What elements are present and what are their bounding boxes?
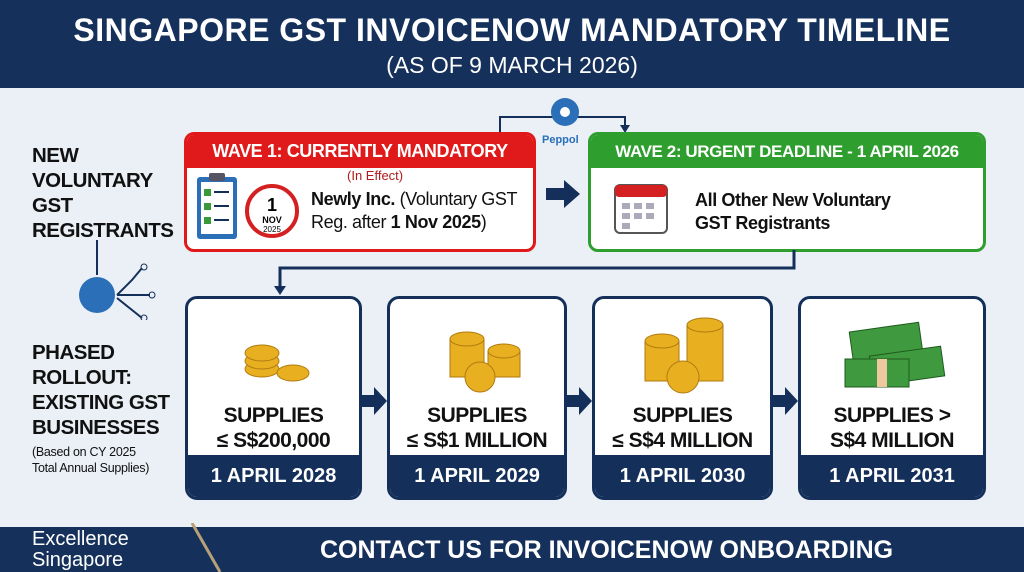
subtitle: (AS OF 9 MARCH 2026) bbox=[386, 52, 638, 78]
card 4: S$4 MILLION bbox=[830, 429, 954, 452]
in effect: (In Effect) bbox=[347, 168, 403, 183]
left label: new voluntary: NEW bbox=[32, 144, 78, 167]
wave 2 text: GST Registrants bbox=[695, 213, 830, 233]
connector: peppol bbox=[499, 98, 630, 132]
left label: phased rollout: EXISTING GST bbox=[32, 391, 170, 414]
wave 1 text: Newly Inc. (Voluntary GST bbox=[311, 189, 517, 209]
connector: wave2 to phased bbox=[274, 250, 796, 295]
card 1: ≤ S$200,000 bbox=[217, 429, 330, 452]
icon: network globe bbox=[79, 240, 156, 320]
card 2: ≤ S$1 MILLION bbox=[407, 429, 547, 452]
footer call to action: CONTACT US FOR INVOICENOW ONBOARDING bbox=[320, 536, 893, 564]
left label: phased rollout: BUSINESSES bbox=[32, 416, 159, 439]
card 4: SUPPLIES > bbox=[834, 404, 950, 427]
card 1: SUPPLIES bbox=[224, 404, 323, 427]
left label: phased rollout: PHASED bbox=[32, 341, 114, 364]
card 3 bbox=[592, 296, 773, 500]
wave 2 text: All Other New Voluntary bbox=[695, 190, 890, 210]
card 4: 1 APRIL 2031 bbox=[829, 465, 955, 487]
card 2: 1 APRIL 2029 bbox=[414, 465, 540, 487]
footer brand bbox=[32, 528, 129, 571]
wave 1 text: Reg. after 1 Nov 2025) bbox=[311, 212, 486, 232]
left label: new voluntary: REGISTRANTS bbox=[32, 219, 173, 242]
card 2: SUPPLIES bbox=[427, 404, 527, 427]
icon: cash bundles bbox=[844, 322, 946, 388]
arrow 1 bbox=[362, 387, 387, 415]
peppol label: Peppol bbox=[542, 134, 579, 146]
wave 2 text bbox=[695, 190, 891, 233]
icon: clipboard and clock: 2025 bbox=[263, 225, 281, 234]
left label: new voluntary: VOLUNTARY bbox=[32, 169, 153, 192]
left label: phased rollout: ROLLOUT: bbox=[32, 366, 132, 389]
wave 1 header bbox=[187, 135, 533, 168]
card 3: 1 APRIL 2030 bbox=[620, 465, 745, 487]
arrow 3 bbox=[773, 387, 798, 415]
card 1: 1 APRIL 2028 bbox=[211, 465, 336, 487]
icon: clipboard and clock: 1 bbox=[267, 195, 277, 215]
wave 2 box bbox=[588, 132, 986, 252]
icon: coins bbox=[244, 344, 310, 382]
card 3: SUPPLIES bbox=[633, 404, 732, 427]
left label: phased rollout bbox=[32, 341, 170, 475]
header bbox=[0, 0, 1024, 88]
left label: phased rollout: Total Annual Supplies) bbox=[32, 461, 149, 475]
left label: new voluntary bbox=[32, 144, 174, 242]
wave 1 box bbox=[184, 132, 536, 252]
icon: clipboard and clock: NOV bbox=[262, 215, 282, 225]
left label: phased rollout: (Based on CY 2025 bbox=[32, 445, 136, 459]
icon: clipboard and clock bbox=[197, 173, 299, 239]
footer brand: Singapore bbox=[32, 549, 123, 571]
wave 1 header: WAVE 1: CURRENTLY MANDATORY bbox=[212, 141, 508, 161]
title: SINGAPORE GST INVOICENOW MANDATORY TIMELINE bbox=[73, 12, 951, 48]
icon: coin stacks bbox=[450, 332, 520, 392]
wave 2 header: WAVE 2: URGENT DEADLINE - 1 APRIL 2026 bbox=[615, 142, 959, 161]
card 4 bbox=[798, 296, 986, 500]
card 2 bbox=[387, 296, 567, 500]
arrow: wave1 to wave2 bbox=[546, 180, 580, 208]
footer brand: Excellence bbox=[32, 528, 129, 550]
left label: new voluntary: GST bbox=[32, 194, 73, 217]
card 1 bbox=[185, 296, 362, 500]
arrow 2 bbox=[567, 387, 592, 415]
footer bbox=[0, 527, 1024, 572]
card 3: ≤ S$4 MILLION bbox=[612, 429, 753, 452]
wave 2 header bbox=[591, 135, 983, 168]
wave 1 text bbox=[311, 189, 518, 232]
icon: calendar bbox=[614, 184, 668, 234]
icon: big coin stacks bbox=[644, 318, 724, 394]
